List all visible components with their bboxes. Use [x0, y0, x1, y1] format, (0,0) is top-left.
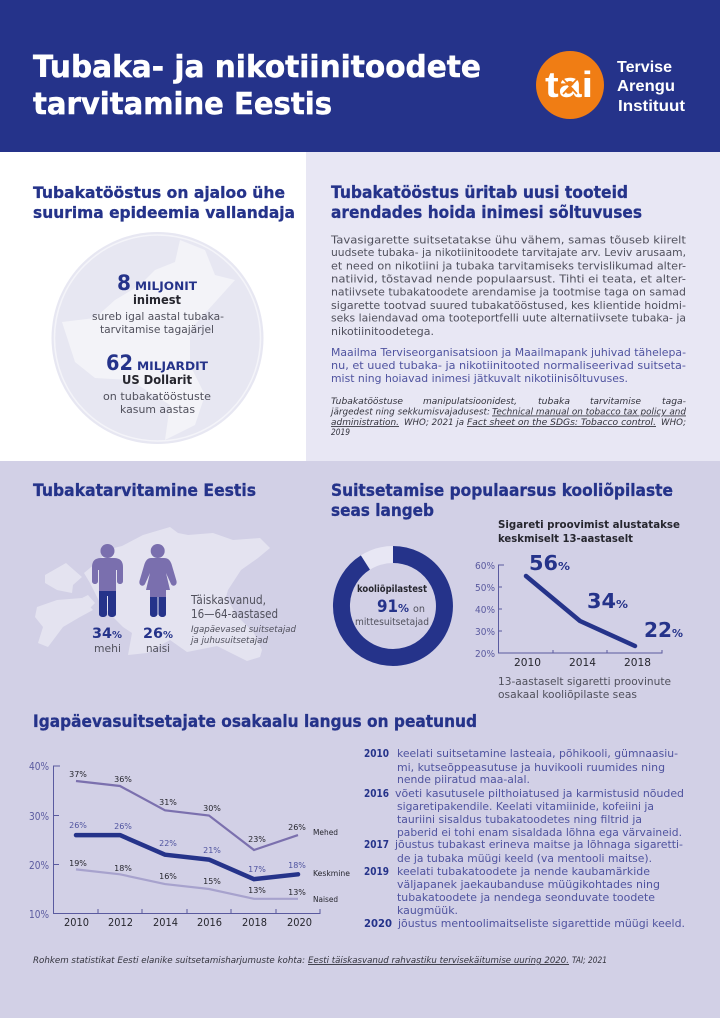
stat: women 26% — [143, 626, 173, 655]
heading: new products: arendades hoida inimesi sõltuvuses — [331, 203, 642, 223]
text block: adults — [190, 593, 297, 646]
text block: body: sigarette tootvad suured tubakatööstused, kes klientide hoidmi- — [331, 299, 686, 312]
text block: adults: Täiskasvanud, — [190, 593, 266, 607]
line: men: 37% — [69, 770, 87, 779]
stat: 62 billion dollars — [103, 351, 211, 416]
chart: age 13 trial line: % — [558, 560, 570, 573]
icon: woman — [139, 544, 177, 617]
chart: donut 91%: mittesuitsetajad — [355, 617, 429, 628]
text block: WHO statement: mist ning hoiavad inimesi jätkuvalt nikotiinisõltuvuses. — [331, 372, 628, 385]
text block: sources: Tubakatööstuse — [331, 397, 403, 407]
line: men: 23% — [248, 835, 266, 844]
text block: policy timeline: jõustus tubakast erineva maitse ja lõhnaga sigaretti- — [394, 838, 683, 851]
line: average: Keskmine — [313, 869, 350, 878]
chart: age 13 trial line: 34 — [587, 589, 616, 613]
text block: chart heading — [498, 519, 680, 545]
heading: epidemic — [33, 183, 295, 222]
stat: women 26%: naisi — [146, 643, 170, 655]
text block: sources: tarvitamise — [590, 397, 641, 407]
heading: daily smokers: Igapäevasuitsetajate osakaalu langus on peatunud — [33, 712, 477, 731]
chart: age 13 trial line: % — [672, 627, 683, 640]
heading: Estonia: Tubakatarvitamine Eestis — [33, 481, 256, 500]
footer: source note: TAI; 2021 — [572, 956, 607, 966]
line: men: 31% — [159, 798, 177, 807]
text block: policy timeline: nende piiratud maa-alal. — [397, 773, 530, 786]
line: average: 26% — [114, 822, 132, 831]
line: men — [69, 770, 338, 850]
chart: age 13 trial line: 20% — [475, 649, 495, 660]
chart: daily smokers share: 2012 — [108, 916, 133, 929]
panel: new products — [306, 152, 720, 461]
stat: 8 million people: sureb igal aastal tubaka- — [92, 311, 224, 323]
text block: body: uudsete tubaka- ja nikotiinitoodete tarvitajate arv. Leviv arusaam, — [331, 246, 686, 259]
text block: body: seks laiendavad oma tooteportfelli uute alternatiivsete tubaka- ja — [331, 312, 686, 324]
title: Tubaka- ja nikotiinitoodete — [33, 50, 481, 85]
text block: policy timeline: 2016 — [364, 787, 389, 800]
stat: 8 million people: inimest — [133, 292, 181, 307]
line: women: 16% — [159, 872, 177, 881]
text block: policy timeline: mi, kutseõppeasutuse ja huvikooli ruumides ning — [397, 761, 665, 774]
stat: 62 billion dollars: on tubakatööstuste — [103, 391, 211, 403]
text block: body: nikotiinitoodetega. — [331, 325, 434, 338]
text block: sources: manipulatsioonidest, — [423, 397, 517, 407]
text block: sources: järgedest ning sekkumisvajadusest: — [330, 408, 490, 418]
text block: sources: WHO; 2021 ja — [404, 418, 464, 428]
chart: age 13 trial line: 40% — [475, 605, 495, 616]
line: average: 17% — [248, 865, 266, 874]
chart: donut 91% — [341, 554, 444, 658]
text block: policy timeline: tubakatoodete ja nendega seonduvate toodete — [397, 891, 655, 904]
chart: donut 91%: kooliõpilastest — [357, 584, 427, 595]
line: average: 22% — [159, 839, 177, 848]
text block: policy timeline: 2017 — [364, 838, 389, 851]
logo: Tervise Arengu Instituut: tai — [545, 64, 593, 105]
chart: daily smokers share: 2018 — [242, 916, 267, 929]
text block: policy timeline: 2020 — [364, 917, 392, 930]
line: men: 30% — [203, 804, 221, 813]
line: women — [69, 859, 338, 904]
text block: sources: tubaka — [538, 397, 570, 407]
text block: body: natiivid, tõstavad nende populaarsust. Tihti ei teata, et alter- — [331, 272, 686, 286]
line: women: 15% — [203, 877, 221, 886]
chart: daily smokers share: 2020 — [287, 916, 312, 929]
footer: source note — [33, 956, 607, 966]
text block: body: Tavasigarette suitsetatakse ühu vähem, samas tõuseb kiirelt — [330, 234, 686, 246]
text block: adults: ja juhusuitsetajad — [190, 636, 269, 646]
chart: donut 91%: on — [413, 604, 425, 615]
line: women: Naised — [313, 895, 338, 904]
footer: source note: Eesti täiskasvanud rahvastiku tervisekäitumise uuring 2020. — [308, 956, 569, 966]
text block: sources: administration. — [331, 418, 399, 428]
footer: source note: Rohkem statistikat Eesti elanike suitsetamisharjumuste kohta: — [33, 956, 305, 966]
chart: daily smokers share: 20% — [29, 859, 49, 872]
heading: epidemic: Tubakatööstus on ajaloo ühe — [33, 183, 285, 202]
stat: 8 million people: tarvitamise tagajärjel — [100, 324, 214, 336]
line: average — [69, 821, 350, 879]
heading: school students: Suitsetamise populaarsus kooliõpilaste — [331, 481, 673, 500]
stat: 62 billion dollars: MILJARDIT — [137, 359, 208, 373]
heading: school students — [331, 481, 673, 520]
chart: age 13 trial line: 2010 — [514, 656, 541, 669]
chart: daily smokers share: 30% — [29, 810, 49, 823]
text block: chart caption: 13-aastaselt sigaretti proovinute — [498, 676, 671, 688]
text block: policy timeline: väljapanek jaekaubanduse müügikohtades ning — [397, 878, 660, 891]
stat: 8 million people: MILJONIT — [135, 279, 197, 293]
panel: school students — [331, 481, 683, 701]
chart: age 13 trial line: 2018 — [624, 656, 651, 669]
chart: age 13 trial line — [475, 551, 683, 669]
text block: WHO statement — [331, 346, 686, 385]
line: women: 13% — [288, 888, 306, 897]
line: men: 26% — [288, 823, 306, 832]
text block: policy timeline — [364, 747, 685, 930]
line: women: 19% — [69, 859, 87, 868]
text block: adults: Igapäevased suitsetajad — [191, 625, 297, 635]
chart: daily smokers share: 40% — [29, 760, 49, 773]
stat: 62 billion dollars: kasum aastas — [120, 404, 195, 416]
chart: daily smokers share — [29, 760, 350, 929]
text block: body: et need on nikotiini ja tubaka tarvitamiseks tervislikumad alter- — [331, 260, 686, 272]
chart: age 13 trial line: 56 — [529, 551, 558, 575]
chart: daily smokers share: 2016 — [197, 916, 222, 929]
text block: policy timeline: sigaretipakendile. Keelati vitamiinide, kofeiini ja — [397, 800, 654, 813]
chart: age 13 trial line: 60% — [475, 561, 495, 572]
chart: age 13 trial line: 30% — [475, 627, 495, 638]
text block: policy timeline: 2019 — [364, 865, 389, 878]
text block: policy timeline: kaugmüük. — [397, 904, 458, 917]
heading: school students: seas langeb — [331, 501, 434, 520]
chart: donut 91%: % — [398, 603, 409, 615]
chart: age 13 trial line: % — [616, 598, 628, 611]
text block: adults: 16—64-aastased — [191, 607, 278, 621]
chart: daily smokers share: 2010 — [64, 916, 89, 929]
icon: globe — [52, 232, 264, 444]
logo: Tervise Arengu Instituut: Tervise — [617, 59, 672, 76]
text block: policy timeline: jõustus mentoolimaitseliste sigarettide müügi keeld. — [397, 917, 685, 930]
stat: men 34% — [92, 626, 122, 655]
text block: sources: 2019 — [331, 428, 350, 438]
line: average: 26% — [69, 821, 87, 830]
line: men: Mehed — [313, 828, 338, 837]
text block: policy timeline: 2010 — [364, 747, 389, 760]
text block: sources: taga- — [662, 397, 686, 407]
chart: age 13 trial line: 50% — [475, 583, 495, 594]
stat: 8 million people — [92, 271, 224, 336]
panel: tobacco epidemic — [0, 152, 306, 461]
panel: tobacco use in Estonia — [33, 481, 297, 661]
chart: age 13 trial line: 2014 — [569, 656, 596, 669]
text block: sources: Fact sheet on the SDGs: Tobacco control. — [467, 418, 656, 428]
icon: man — [92, 544, 123, 617]
text block: policy timeline: paberid ei tohi enam sisaldada lõhna ega värvaineid. — [397, 826, 682, 839]
map: Estonia — [35, 527, 270, 661]
stat: men 34%: 34 — [92, 626, 112, 642]
text block: policy timeline: keelati suitsetamine lasteaia, põhikooli, gümnaasiu- — [397, 747, 678, 760]
text block: sources: Technical manual on tobacco tax policy and — [492, 408, 687, 418]
panel: header — [0, 0, 720, 152]
text block: sources: WHO; — [661, 418, 686, 428]
stat: men 34%: mehi — [94, 643, 121, 655]
heading: new products: Tubakatööstus üritab uusi tooteid — [331, 183, 628, 203]
line: women: 13% — [248, 886, 266, 895]
logo: Tervise Arengu Instituut: Arengu — [617, 78, 675, 95]
logo: Tervise Arengu Instituut: Instituut — [618, 98, 686, 115]
stat: women 26%: 26 — [143, 626, 163, 642]
logo: Tervise Arengu Instituut — [536, 51, 686, 119]
text block: chart heading: Sigareti proovimist alustatakse — [498, 519, 680, 531]
text block: chart heading: keskmiselt 13-aastaselt — [498, 533, 633, 545]
text block: policy timeline: tauriini sisaldus tubakatoodetes ning filtrid ja — [397, 813, 642, 826]
text block: body: natiivsete tubakatoodete arendamise ja tootmise taga on samad — [331, 286, 686, 298]
stat: 62 billion dollars: 62 — [106, 351, 133, 375]
chart: donut 91%: 91 — [377, 597, 398, 617]
line: average: 18% — [288, 861, 306, 870]
text block: policy timeline: de ja tubaka müügi keeld (va mentooli maitse). — [397, 852, 652, 865]
title: tarvitamine Eestis — [33, 87, 332, 122]
chart: daily smokers share: 2014 — [153, 916, 178, 929]
text block: WHO statement: Maailma Terviseorganisatsioon ja Maailmapank juhivad tähelepa- — [331, 346, 686, 359]
text block: body — [330, 234, 686, 338]
heading: new products — [331, 183, 642, 223]
text block: sources — [330, 397, 687, 438]
line: women: 18% — [114, 864, 132, 873]
text block: chart caption: osakaal kooliõpilaste seas — [498, 689, 637, 701]
heading: epidemic: suurima epideemia vallandaja — [33, 203, 295, 222]
text block: chart caption — [498, 676, 671, 701]
text block: policy timeline: keelati tubakatoodete ja nende kaubamärkide — [397, 865, 650, 878]
stat: women 26%: % — [163, 630, 173, 641]
line: average: 21% — [203, 846, 221, 855]
text block: policy timeline: võeti kasutusele pilthoiatused ja karmistusid nõuded — [395, 787, 684, 800]
title — [33, 50, 481, 122]
stat: 62 billion dollars: US Dollarit — [122, 372, 192, 387]
stat: men 34%: % — [112, 630, 122, 641]
stat: 8 million people: 8 — [117, 271, 131, 295]
chart: age 13 trial line: 22 — [644, 618, 672, 642]
line: men: 36% — [114, 775, 132, 784]
chart: daily smokers share: 10% — [29, 908, 49, 921]
text block: WHO statement: nu, et uued tubaka- ja nikotiinitooted normaliseerivad suitseta- — [331, 359, 686, 372]
